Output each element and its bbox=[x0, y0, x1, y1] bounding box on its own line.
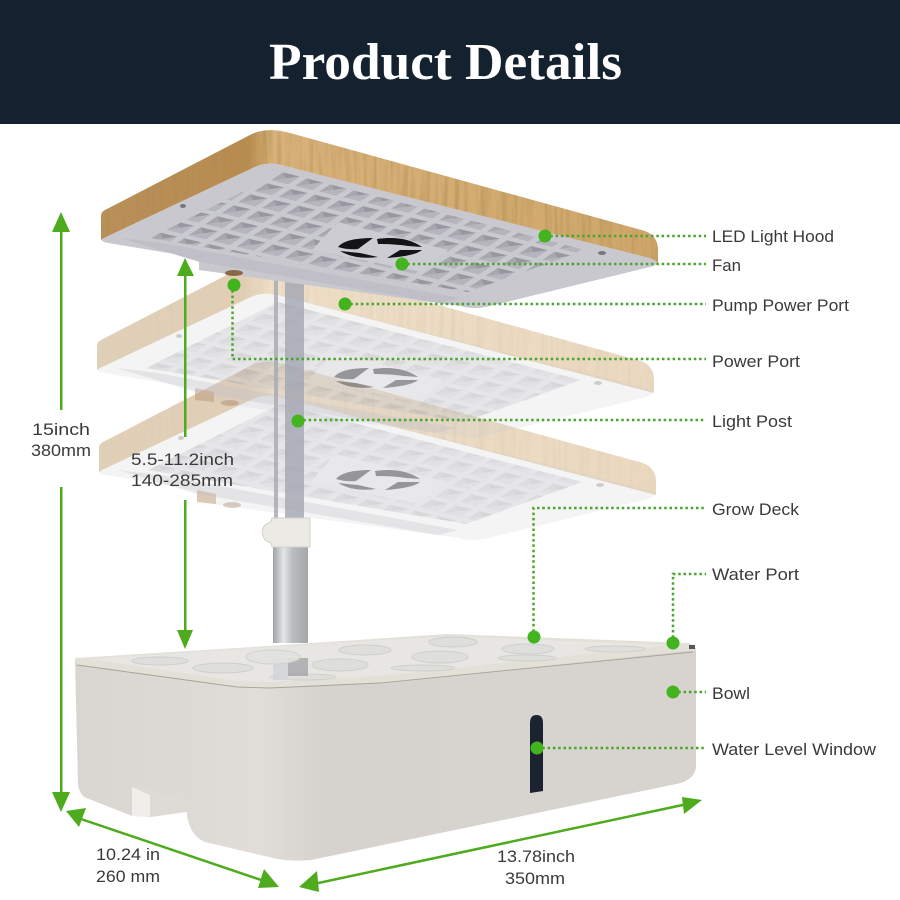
dimension: depth: 10.24 in bbox=[96, 845, 160, 864]
callout: fan bbox=[396, 256, 741, 275]
handle notch bbox=[132, 787, 187, 817]
dimension: adjustable height: 140-285mm bbox=[131, 471, 233, 490]
callout: water level window: Water Level Window bbox=[712, 740, 877, 759]
plant pods bbox=[132, 637, 645, 680]
callout: power port bbox=[228, 278, 800, 371]
dimension: total height: 380mm bbox=[31, 441, 91, 460]
callout: pump power port: Pump Power Port bbox=[712, 296, 849, 315]
callout: fan: Fan bbox=[712, 256, 741, 275]
LED light hood bbox=[95, 125, 665, 308]
lid rim bbox=[75, 634, 696, 688]
callout: bowl bbox=[666, 684, 750, 703]
callout: water port: Water Port bbox=[712, 565, 799, 584]
callout: bowl: Bowl bbox=[712, 684, 750, 703]
dimension: total height: 15inch bbox=[32, 420, 90, 439]
water port tip bbox=[689, 645, 695, 649]
water level window bbox=[530, 715, 543, 793]
dimension: depth bbox=[96, 845, 160, 886]
bowl bbox=[75, 634, 696, 861]
dimension: width bbox=[497, 847, 575, 888]
grow deck bottom position bbox=[93, 357, 663, 540]
depth arrow 260mm bbox=[66, 808, 279, 888]
callout: light post: Light Post bbox=[712, 412, 792, 431]
post reflection bbox=[246, 650, 308, 680]
lid seam bbox=[77, 652, 693, 688]
dimension: total height bbox=[31, 420, 91, 460]
callout: LED light hood bbox=[538, 227, 834, 246]
dimension: adjustable height: 5.5-11.2inch bbox=[131, 450, 234, 469]
bowl body bbox=[75, 648, 696, 861]
callout: grow deck bbox=[528, 500, 800, 644]
light post bbox=[262, 280, 310, 643]
width arrow 350mm bbox=[299, 797, 702, 892]
dimension: width: 350mm bbox=[505, 869, 565, 888]
title: Product Details bbox=[269, 34, 622, 91]
callout: LED light hood: LED Light Hood bbox=[712, 227, 834, 246]
callout: light post bbox=[292, 412, 792, 431]
callout: grow deck: Grow Deck bbox=[712, 500, 800, 519]
callout: water port bbox=[666, 565, 799, 650]
callout: power port: Power Port bbox=[712, 352, 800, 371]
grow deck middle position bbox=[91, 255, 661, 438]
header bar bbox=[0, 0, 900, 124]
lid top surface bbox=[90, 636, 670, 682]
callout: water level window bbox=[530, 740, 877, 759]
height arrow 380mm bbox=[52, 212, 70, 812]
dimension: depth: 260 mm bbox=[96, 867, 160, 886]
adjustable height arrow bbox=[177, 258, 194, 649]
dimension: adjustable height bbox=[131, 450, 234, 490]
dimension: width: 13.78inch bbox=[497, 847, 575, 866]
callout: pump power port bbox=[338, 296, 849, 315]
